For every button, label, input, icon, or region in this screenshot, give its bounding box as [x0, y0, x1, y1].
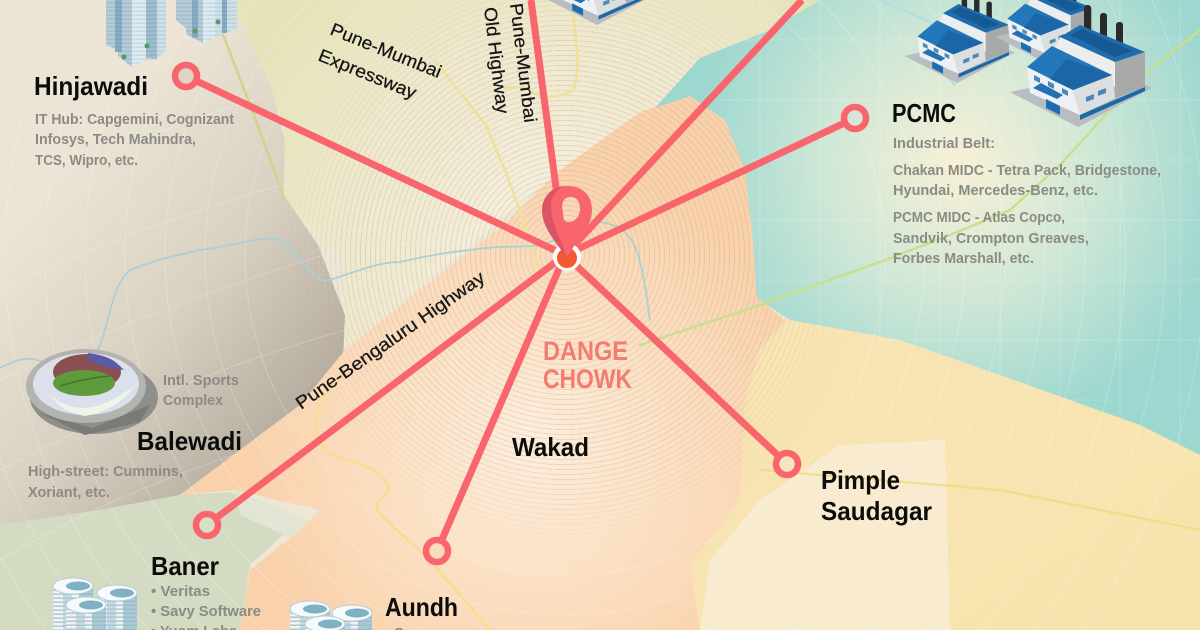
region: south yellow	[680, 300, 1200, 630]
region: Hinjawadi hills	[0, 0, 345, 525]
label: Pimple Saudagar: Pimple	[821, 465, 900, 495]
connector lines	[186, 0, 855, 551]
label: PCMC: PCMC	[892, 98, 956, 128]
node: Pimple Saudagar	[776, 453, 798, 475]
label: Baner: Baner	[151, 551, 219, 581]
text: PCMC companies: PCMC MIDC - Atlas Copco,	[893, 210, 1065, 226]
label: Dange Chowk	[543, 336, 632, 394]
region: central highway plain	[225, 0, 820, 350]
label: Balewadi: Balewadi	[137, 426, 242, 456]
region: Baner green	[0, 492, 300, 630]
text: Balewadi companies	[28, 464, 183, 501]
label: Hinjawadi	[34, 71, 234, 169]
icon: PCMC factories	[904, 0, 1152, 127]
icon: stadium	[26, 349, 158, 435]
region: Wakad peach	[180, 96, 785, 630]
label: PCMC	[892, 98, 1161, 267]
line: to Pimple Saudagar	[574, 264, 780, 457]
text: PCMC companies: Hyundai, Mercedes-Benz, etc.	[893, 183, 1098, 199]
text: PCMC companies: Chakan MIDC - Tetra Pack, Bridgestone,	[893, 163, 1161, 179]
node: Baner	[196, 514, 218, 536]
label: Wakad: Wakad	[512, 432, 589, 462]
text: Hinjawadi companies: TCS, Wipro, etc.	[35, 153, 138, 169]
line: to PCMC	[577, 120, 844, 252]
line: to Hinjawadi	[186, 76, 565, 255]
text: Balewadi companies: Xoriant, etc.	[28, 485, 110, 501]
label: Pune-Mumbai Old Highway	[480, 2, 541, 124]
text: Hinjawadi companies: IT Hub: Capgemini, Cognizant	[35, 112, 234, 128]
text: Balewadi companies: High-street: Cummins,	[28, 464, 183, 480]
text: Hinjawadi companies	[35, 112, 234, 169]
line: to Pune-Mumbai top	[531, 0, 565, 255]
icon: Hinjawadi towers	[106, 0, 237, 67]
label: Intl. Sports Complex: Intl. Sports	[163, 373, 239, 389]
label: Pune-Mumbai Expressway	[316, 19, 444, 103]
text: PCMC companies	[893, 136, 1161, 267]
text: PCMC companies: Forbes Marshall, etc.	[893, 251, 1034, 267]
label: Hinjawadi: Hinjawadi	[34, 71, 148, 101]
label: Pimple Saudagar	[821, 465, 932, 526]
label: Pune-Mumbai Old Highway: Pune-Mumbai	[506, 2, 541, 124]
node markers	[175, 65, 866, 562]
text: PCMC companies: Sandvik, Crompton Greaves,	[893, 231, 1089, 247]
text: PCMC companies: Industrial Belt:	[893, 136, 995, 152]
text: Baner companies: • Veritas	[151, 584, 210, 600]
label: Aundh: Aundh	[385, 592, 458, 622]
text: Baner companies: • Savy Software	[151, 604, 261, 620]
node: Aundh	[426, 540, 448, 562]
label: Pune-Mumbai Expressway: Pune-Mumbai	[328, 19, 444, 82]
text: Hinjawadi companies: Infosys, Tech Mahindra,	[35, 132, 196, 148]
label: Pune-Bengaluru Highway: Pune-Bengaluru Highway	[292, 267, 488, 413]
line: to Baner	[207, 255, 565, 525]
node: Hinjawadi	[175, 65, 197, 87]
text: Baner companies	[151, 584, 261, 630]
line: to top right	[565, 0, 802, 255]
patch: Baner light	[235, 490, 312, 540]
node: PCMC	[844, 107, 866, 129]
region: PCMC teal	[655, 0, 1200, 455]
icon: Baner towers	[53, 578, 137, 630]
icon: Aundh towers	[290, 601, 372, 630]
label: Pune-Mumbai Old Highway: Old Highway	[480, 6, 513, 115]
line: to Aundh	[439, 266, 562, 540]
label: Dange Chowk: DANGE	[543, 336, 628, 366]
label: Pimple Saudagar: Saudagar	[821, 496, 932, 526]
label: Intl. Sports Complex: Complex	[163, 393, 223, 409]
icon: top factory	[548, 0, 644, 25]
icon: location pin	[542, 186, 592, 271]
label: Intl. Sports Complex	[163, 373, 239, 409]
patch: south pale	[700, 440, 950, 630]
contour rings	[293, 0, 830, 535]
label: Pune-Mumbai Expressway: Expressway	[316, 45, 419, 103]
label: Dange Chowk: CHOWK	[543, 364, 632, 394]
